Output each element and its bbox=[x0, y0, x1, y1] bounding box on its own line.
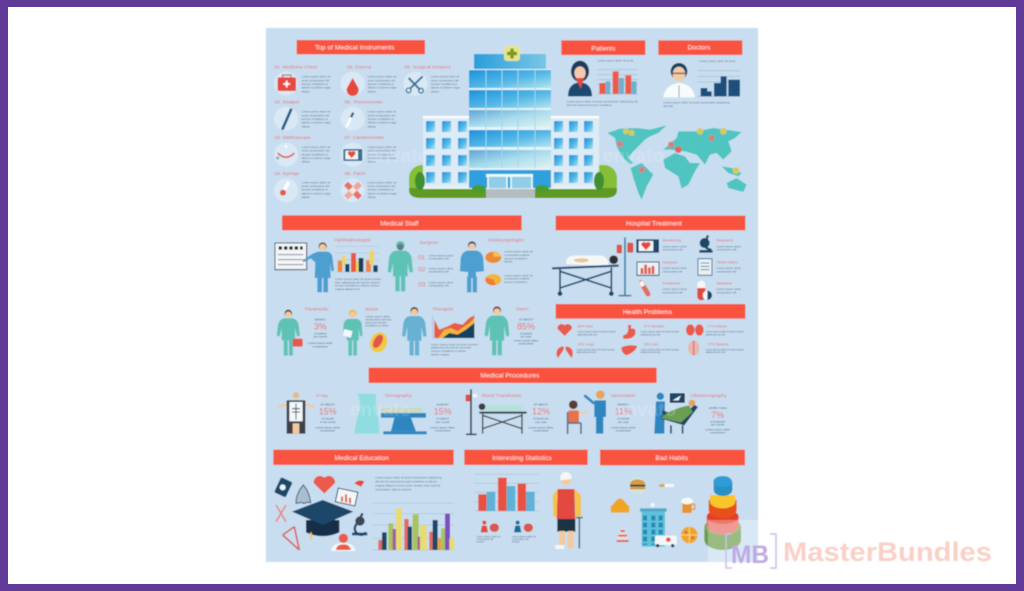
label and pies: otolaryngologist: tempor incididunt bbox=[504, 280, 527, 284]
item: scalpel: amet consectetur elit bbox=[302, 113, 329, 117]
area chart: therapist: adipiscing elit sed do eiusmod bbox=[431, 346, 471, 350]
item: medicine bbox=[697, 280, 741, 300]
label and pies: otolaryngologist: tempor incididunt bbox=[504, 256, 527, 260]
item: scalpel bbox=[274, 100, 331, 131]
item: stethoscope: tempor incididunt ut bbox=[302, 152, 328, 156]
panel: medical education and statistics bbox=[273, 450, 588, 551]
item: stethoscope: amet consectetur elit bbox=[302, 149, 329, 153]
heading: medical education bbox=[273, 450, 454, 465]
procedure: ultrasonography: 7% bbox=[711, 410, 724, 420]
item: medicine chest: 01. Medicine Chest bbox=[274, 64, 318, 70]
bar chart: statistics bbox=[474, 474, 539, 511]
item: medicine: consectetur elit bbox=[716, 290, 737, 294]
item: cardiomonitor: Lorem ipsum dolor sit bbox=[368, 145, 396, 149]
heading: health problems bbox=[556, 304, 745, 319]
illustration: patient on bed bbox=[552, 255, 619, 296]
stats: figures and captions: consectetur elit bbox=[477, 538, 494, 541]
item: treatment: Treatment bbox=[662, 280, 681, 285]
item: heart: 34% Heart bbox=[577, 325, 593, 329]
bar chart: doctors: Lorem ipsum dolor sit amet consectetur adipiscing bbox=[663, 101, 730, 105]
item: enema bbox=[341, 64, 397, 96]
bar chart: education bbox=[373, 503, 454, 550]
item: medicine: Medicine bbox=[716, 280, 733, 285]
text block: education: magna aliqua ut enim minim veniam quis nostrud bbox=[375, 484, 441, 488]
procedure: ultrasonography bbox=[654, 393, 730, 435]
label and steps: surgeon: 03 bbox=[418, 281, 426, 288]
label and steps: surgeon: 01 bbox=[418, 254, 426, 261]
item: surgical scissors: 09. Surgical Scissors bbox=[404, 64, 451, 70]
text and pill: nurse: Lorem ipsum dolor bbox=[365, 315, 390, 319]
procedure: x-ray: consectetur bbox=[320, 428, 335, 432]
item: syringe: labore et dolore magn bbox=[302, 191, 331, 195]
procedure: blood transfusion: consectetur bbox=[533, 428, 549, 432]
item: patch: tempor incididunt ut bbox=[368, 188, 394, 192]
area chart: therapist: tempor incididunt ut labore bbox=[431, 349, 466, 353]
watermark: envato stock marks: envato bbox=[350, 400, 411, 421]
item: surgical scissors: aliqua bbox=[431, 89, 439, 93]
procedure: ultrasonography: per month bbox=[711, 423, 725, 427]
item: treatment: Lorem ipsum dolor bbox=[662, 287, 687, 291]
label and pies: otolaryngologist: labore bbox=[504, 260, 513, 264]
item: heart: adipiscing elit sed bbox=[577, 333, 598, 336]
label and pies: otolaryngologist: consectetur adipisc bbox=[504, 277, 530, 281]
icon: doctor bbox=[663, 63, 695, 97]
heading: interesting statistics bbox=[464, 450, 588, 465]
label and steps: surgeon: 02 bbox=[418, 267, 426, 274]
procedure: ultrasonography: Lorem ipsum dolor bbox=[705, 428, 730, 432]
item: syringe: 04. Syringe bbox=[274, 171, 300, 177]
heading: medical procedures bbox=[369, 368, 657, 383]
panel: top of medical instruments bbox=[274, 40, 460, 202]
item: observation: Lorem ipsum dolor bbox=[716, 266, 741, 270]
label and pies: otolaryngologist: Lorem ipsum dolor sit bbox=[504, 273, 533, 277]
procedure: tomography: of patient bbox=[437, 417, 449, 421]
text and pill: nurse: Nurse bbox=[365, 306, 379, 312]
stat: intern: of patient bbox=[520, 331, 532, 335]
procedure: vaccination bbox=[568, 390, 636, 434]
stat: paramedic bbox=[293, 306, 333, 348]
figure: ophthalmologist bbox=[303, 242, 334, 292]
item: cardiomonitor: 07. Cardiomonitor bbox=[345, 135, 385, 141]
infographic panel bbox=[266, 28, 758, 562]
icon: eye chart bbox=[275, 243, 307, 270]
bar chart: patients: Lorem ipsum dolor sit amet consectetur adipiscing elit. bbox=[567, 100, 639, 104]
item: observation bbox=[698, 259, 741, 275]
procedure: blood transfusion: 12% bbox=[532, 407, 550, 417]
label and steps: surgeon: Lorem ipsum dolor bbox=[429, 266, 453, 270]
procedure: vaccination: Vaccination bbox=[610, 393, 636, 399]
item: scalpel: labore et dolore magn bbox=[302, 121, 331, 125]
procedure: tomography: Tomography bbox=[384, 393, 412, 399]
bar chart: patients: Sed do eiusmod tempor incididunt bbox=[567, 103, 612, 107]
figure: otolaryngologist bbox=[460, 241, 484, 292]
icon: ambulance bbox=[655, 536, 677, 547]
item: scalpel: Lorem ipsum dolor sit bbox=[302, 110, 330, 114]
watermark: MasterBundles logo: MB bbox=[731, 541, 769, 569]
stats: figures and captions: Lorem ipsum dolor sit bbox=[477, 535, 501, 538]
icon: patient bbox=[568, 61, 592, 96]
item: kidneys bbox=[686, 324, 745, 336]
item: heart: Lorem ipsum dolor sit amet consec bbox=[577, 331, 617, 334]
item: lungs: 10% Lungs bbox=[577, 342, 594, 346]
icon: building bbox=[640, 503, 667, 547]
procedure: tomography bbox=[354, 393, 455, 434]
procedure: ultrasonography: Ultrasonography bbox=[690, 393, 727, 399]
item: cardiomonitor: tempor incididunt ut bbox=[368, 152, 394, 156]
item: monitoring: consectetur elit bbox=[662, 248, 683, 252]
item: scalpel: tempor incididunt ut bbox=[302, 117, 328, 121]
text and pill: nurse: consectetur elit sed bbox=[365, 318, 391, 322]
stat: intern: 85% bbox=[517, 321, 535, 331]
figure: intern bbox=[485, 306, 509, 355]
bar chart: doctors: Lorem ipsum dolor sit amet bbox=[699, 59, 735, 63]
label and steps: surgeon: consectetur elit bbox=[429, 269, 449, 273]
stats: figures and captions: consectetur elit bbox=[512, 538, 529, 541]
procedure: blood transfusion bbox=[466, 389, 553, 434]
stats: figures and captions: tempor bbox=[512, 541, 520, 544]
bar chart: patients: Lorem ipsum dolor sit amet bbox=[597, 58, 633, 62]
bar chart: patients bbox=[567, 58, 639, 107]
bar chart: doctors: elit sed bbox=[663, 104, 673, 108]
label and steps: surgeon: Lorem ipsum dolor bbox=[429, 280, 453, 284]
item: surgical scissors: Lorem ipsum dolor sit bbox=[431, 75, 460, 79]
item: patch: 08. Patch bbox=[345, 171, 366, 177]
heading: instruments bbox=[297, 40, 425, 54]
label and chart: ophthalmologist: Lorem ipsum dolor sit amet consec bbox=[335, 277, 382, 281]
item: liver: 15% Liver bbox=[644, 342, 659, 346]
item: thermometer: Lorem ipsum dolor sit bbox=[368, 110, 396, 114]
label and steps: surgeon: Lorem ipsum dolor bbox=[429, 254, 453, 258]
watermark: MasterBundles logo bbox=[708, 520, 992, 569]
item: thermometer: aliqua bbox=[368, 124, 376, 128]
item: research: Research bbox=[716, 238, 733, 243]
panel: bad habits bbox=[600, 450, 745, 550]
item: stethoscope: 03. Stethoscope bbox=[274, 135, 311, 141]
item: stomach bbox=[623, 325, 680, 339]
label and chart: ophthalmologist: Ophthalmologist bbox=[334, 238, 371, 244]
text block: education: exercitation ullamco laboris bbox=[375, 488, 412, 492]
procedure: vaccination: consectetur bbox=[616, 428, 631, 432]
item: enema: Lorem ipsum dolor sit bbox=[368, 75, 396, 79]
stats: figures and captions bbox=[477, 521, 536, 544]
item: observation: consectetur elit bbox=[716, 269, 737, 273]
item: scalpel: 02. Scalpel bbox=[274, 100, 299, 106]
item: cardiomonitor: aliqua bbox=[368, 160, 376, 164]
procedure: vaccination: 11% bbox=[615, 407, 632, 417]
item: monitoring bbox=[636, 238, 687, 253]
watermark: envato stock marks: envato bbox=[615, 400, 676, 421]
figure: therapist bbox=[402, 307, 427, 355]
item: enema: labore et dolore magn bbox=[368, 86, 397, 90]
heading: patients: Patients bbox=[591, 45, 616, 52]
item: cardiomonitor bbox=[341, 135, 397, 167]
item: treatment: consectetur elit bbox=[662, 290, 683, 294]
panel: medical procedures bbox=[278, 368, 730, 435]
item: analysis: Lorem ipsum dolor bbox=[662, 266, 687, 270]
stat: intern: AT ABOUT bbox=[519, 318, 533, 322]
icon: iv stand bbox=[617, 237, 633, 296]
stats: figures and captions: Lorem ipsum dolor sit bbox=[512, 535, 536, 538]
procedure: vaccination: NEARLY bbox=[617, 403, 629, 407]
chart: stacked cylinder pyramid bbox=[704, 476, 741, 550]
procedure: ultrasonography: of pregnant bbox=[710, 419, 725, 423]
heading: interesting statistics: Interesting Statistics bbox=[492, 455, 552, 462]
item: patch: labore et dolore magn bbox=[368, 191, 397, 195]
item: heart bbox=[557, 324, 617, 336]
item: medicine chest: labore et dolore magn bbox=[302, 86, 331, 90]
item: surgical scissors: labore et dolore magn bbox=[431, 86, 460, 90]
stat: paramedic: NEARLY bbox=[314, 318, 326, 322]
procedure: tomography: per month bbox=[436, 420, 450, 424]
panel: hospital treatment and health problems bbox=[552, 216, 745, 358]
label and steps: surgeon: Surgeon bbox=[419, 240, 438, 246]
item: medicine: Lorem ipsum dolor bbox=[716, 287, 741, 291]
item: monitoring: Lorem ipsum dolor bbox=[662, 244, 687, 248]
item: analysis: consectetur elit bbox=[662, 269, 683, 273]
item: skeleton: adipiscing elit sed bbox=[706, 351, 726, 354]
stat: paramedic: per month bbox=[314, 335, 327, 339]
item: medicine chest: amet consectetur elit bbox=[302, 78, 329, 82]
label and steps: surgeon: consectetur elit bbox=[429, 257, 449, 261]
item: stomach: 37% Stomach bbox=[644, 325, 665, 329]
item: syringe bbox=[274, 171, 331, 202]
procedure: tomography: consectetur bbox=[435, 428, 450, 432]
icon: armchair bbox=[611, 498, 629, 513]
figure: man with crutch bbox=[553, 472, 583, 549]
procedure: x-ray: in the world bbox=[320, 420, 336, 424]
item: kidneys: 17% Kidneys bbox=[707, 325, 727, 329]
heading: patients bbox=[561, 40, 645, 55]
item: surgical scissors: tempor incididunt ut bbox=[431, 82, 457, 86]
label and pies: otolaryngologist: consectetur adipisc bbox=[504, 253, 530, 257]
stat: intern: Lorem ipsum dolor bbox=[514, 338, 538, 342]
item: thermometer: 06. Thermometer bbox=[345, 100, 383, 106]
item: stethoscope: aliqua bbox=[302, 160, 310, 164]
item: stethoscope bbox=[274, 135, 331, 167]
label and pies: otolaryngologist bbox=[485, 238, 533, 285]
item: lungs bbox=[556, 342, 616, 358]
illustration: hospital building bbox=[409, 46, 617, 198]
item: enema: aliqua bbox=[368, 89, 376, 93]
item: kidneys: adipiscing elit sed bbox=[706, 333, 726, 336]
text and pill: nurse: incididunt ut dolor bbox=[365, 324, 389, 328]
area chart: therapist: dolore magna bbox=[431, 352, 450, 356]
item: medicine chest: aliqua bbox=[302, 89, 310, 93]
item: lungs: adipiscing elit sed bbox=[576, 351, 597, 354]
heading: hospital treatment: Hospital Treatment bbox=[626, 220, 682, 227]
procedure: blood transfusion: Blood Transfusion bbox=[482, 393, 522, 399]
procedure: x-ray: X-ray bbox=[316, 393, 328, 399]
label and steps: surgeon: consectetur elit bbox=[429, 283, 449, 287]
item: syringe: Lorem ipsum dolor sit bbox=[302, 180, 330, 184]
stat: intern: Intern bbox=[516, 306, 529, 312]
heading: medical procedures: Medical Procedures bbox=[481, 373, 540, 380]
stat: paramedic: of patient bbox=[314, 331, 327, 335]
procedure: ultrasonography: consectetur bbox=[710, 431, 725, 435]
icon: cake bbox=[616, 527, 629, 542]
text and pill: nurse: eiusmod tempor bbox=[365, 321, 387, 325]
illustration: education icons bbox=[274, 476, 367, 551]
item: cardiomonitor: amet consectetur elit bbox=[368, 149, 395, 153]
procedure: x-ray: AT ABOUT bbox=[320, 403, 335, 407]
stat: paramedic: 3% bbox=[314, 321, 327, 331]
area chart: therapist: Lorem ipsum dolor sit amet consect bbox=[431, 342, 478, 346]
area chart: therapist bbox=[431, 306, 478, 356]
procedure: blood transfusion: Lorem ipsum dolor bbox=[529, 425, 553, 429]
panel: patients and doctors bbox=[561, 40, 742, 108]
label and pies: otolaryngologist: Lorem ipsum dolor sit bbox=[504, 250, 533, 254]
item: liver: adipiscing elit sed bbox=[641, 351, 661, 354]
procedure: blood transfusion: AT ABOUT bbox=[534, 403, 548, 407]
item: surgical scissors bbox=[403, 64, 460, 96]
text block: education: elit sed do eiusmod tempor incididunt ut labore bbox=[375, 480, 437, 484]
heading: bad habits bbox=[600, 450, 745, 465]
heading: doctors bbox=[658, 40, 742, 55]
item: patch: aliqua bbox=[368, 195, 376, 199]
icon: cigarette bbox=[659, 484, 674, 487]
heading: doctors: Doctors bbox=[688, 45, 711, 52]
heading: medical education: Medical Education bbox=[334, 455, 389, 462]
item: surgical scissors: amet consectetur elit bbox=[431, 78, 459, 82]
stat: paramedic: Paramedic bbox=[305, 306, 329, 312]
item: patch bbox=[341, 171, 397, 202]
stat: intern: consectetur bbox=[518, 342, 534, 346]
procedure: vaccination: of people bbox=[617, 417, 630, 421]
procedure: tomography: 15% bbox=[434, 407, 452, 417]
item: stomach: Lorem ipsum dolor sit amet consec bbox=[641, 331, 680, 334]
panel: medical staff bbox=[275, 215, 538, 356]
watermark: envato stock marks: envato bbox=[603, 146, 664, 167]
procedure: ultrasonography: MORE THAN bbox=[709, 406, 727, 410]
item: research: Lorem ipsum dolor bbox=[716, 244, 741, 248]
heading: medical staff: Medical Staff bbox=[380, 220, 419, 227]
icon: pizza bbox=[681, 527, 698, 543]
item: liver: Lorem ipsum dolor sit amet consec bbox=[641, 348, 680, 351]
item: medicine chest: Lorem ipsum dolor sit bbox=[302, 75, 330, 79]
text block: education: Lorem ipsum dolor sit amet consectetur adipiscing bbox=[375, 476, 442, 480]
procedure: x-ray: Lorem ipsum dolor bbox=[315, 425, 340, 429]
item: skeleton bbox=[688, 341, 745, 355]
item: thermometer: labore et dolore magn bbox=[368, 121, 397, 125]
watermark: envato stock marks: envato bbox=[368, 146, 429, 167]
item: research bbox=[699, 235, 741, 253]
heading: instruments: Top of Medical Instruments bbox=[315, 45, 395, 52]
procedure: x-ray: 15% bbox=[319, 407, 337, 417]
item: enema: 05. Enema bbox=[347, 64, 371, 70]
item: cardiomonitor: labore et dolore magn bbox=[368, 156, 397, 160]
heading: health problems: Health Problems bbox=[623, 309, 673, 316]
procedure: vaccination: per year bbox=[618, 420, 629, 424]
procedure: tomography: ALMOST bbox=[437, 403, 449, 407]
figure: surgeon bbox=[388, 241, 413, 291]
item: lungs: Lorem ipsum dolor sit amet consec bbox=[576, 348, 616, 351]
icon: burger bbox=[629, 477, 646, 494]
item: syringe: tempor incididunt ut bbox=[302, 188, 328, 192]
item: research: consectetur elit bbox=[716, 248, 737, 252]
icon: beer bbox=[681, 498, 695, 513]
bar chart: doctors bbox=[663, 59, 740, 108]
figure: paramedic bbox=[277, 310, 300, 356]
item: stomach: adipiscing elit sed bbox=[641, 333, 661, 336]
item: monitoring: Monitoring bbox=[662, 238, 681, 243]
stat: intern bbox=[514, 306, 538, 346]
item: kidneys: Lorem ipsum dolor sit amet consec bbox=[706, 331, 745, 334]
heading: medical staff bbox=[282, 215, 522, 230]
procedure: blood transfusion: one year bbox=[535, 420, 547, 424]
procedure: blood transfusion: of blood per bbox=[533, 417, 549, 421]
item: enema: amet consectetur elit bbox=[368, 78, 395, 82]
stats: figures and captions: tempor bbox=[477, 541, 485, 544]
item: stethoscope: labore et dolore magn bbox=[302, 156, 331, 160]
item: thermometer bbox=[341, 100, 397, 131]
item: thermometer: tempor incididunt ut bbox=[368, 117, 394, 121]
area chart: therapist: Therapist bbox=[432, 306, 453, 312]
item: skeleton: 27% Skeleton bbox=[708, 342, 729, 346]
item: syringe: amet consectetur elit bbox=[302, 184, 329, 188]
figure: nurse bbox=[343, 309, 362, 356]
procedure: vaccination: Lorem ipsum dolor bbox=[611, 425, 636, 429]
item: analysis bbox=[637, 259, 687, 275]
stat: paramedic: Lorem ipsum dolor bbox=[308, 341, 333, 345]
watermark: envato stock marks bbox=[350, 146, 676, 421]
label and chart: ophthalmologist: tetur adipiscing elit sed do eiusmo bbox=[335, 280, 380, 284]
map: world with pins bbox=[607, 125, 747, 200]
label and chart: ophthalmologist: tempor incididunt ut labore dolore bbox=[335, 284, 380, 288]
procedure: x-ray: of people bbox=[322, 417, 334, 421]
item: medicine chest bbox=[274, 64, 331, 96]
heading: bad habits: Bad Habits bbox=[655, 455, 689, 462]
text and pill: nurse bbox=[365, 306, 391, 355]
watermark: MasterBundles logo: MasterBundles bbox=[783, 537, 992, 567]
text block: education bbox=[375, 476, 442, 492]
stat: intern: per year bbox=[520, 335, 531, 339]
item: medicine chest: tempor incididunt ut bbox=[302, 82, 328, 86]
label and steps: surgeon bbox=[418, 240, 453, 288]
item: treatment bbox=[641, 280, 687, 294]
procedure: x-ray bbox=[278, 392, 340, 434]
item: patch: Lorem ipsum dolor sit bbox=[368, 180, 396, 184]
item: stethoscope: Lorem ipsum dolor sit bbox=[302, 145, 330, 149]
item: enema: tempor incididunt ut bbox=[368, 82, 394, 86]
label and chart: ophthalmologist bbox=[334, 238, 382, 291]
item: observation: Observation bbox=[716, 259, 738, 264]
heading: hospital treatment bbox=[556, 216, 745, 230]
item: syringe: aliqua bbox=[302, 195, 310, 199]
item: patch: amet consectetur elit bbox=[368, 184, 395, 188]
stat: paramedic: consectetur bbox=[313, 344, 328, 348]
procedure: tomography: Lorem ipsum dolor bbox=[430, 425, 455, 429]
item: skeleton: Lorem ipsum dolor sit amet consec bbox=[706, 348, 745, 351]
item: scalpel: aliqua bbox=[302, 124, 310, 128]
item: analysis: Analysis bbox=[662, 259, 677, 264]
label and pies: otolaryngologist: Otolaryngologist bbox=[488, 238, 524, 244]
label and chart: ophthalmologist: magna aliqua enim bbox=[335, 287, 361, 291]
item: liver bbox=[621, 342, 680, 355]
item: thermometer: amet consectetur elit bbox=[368, 113, 395, 117]
